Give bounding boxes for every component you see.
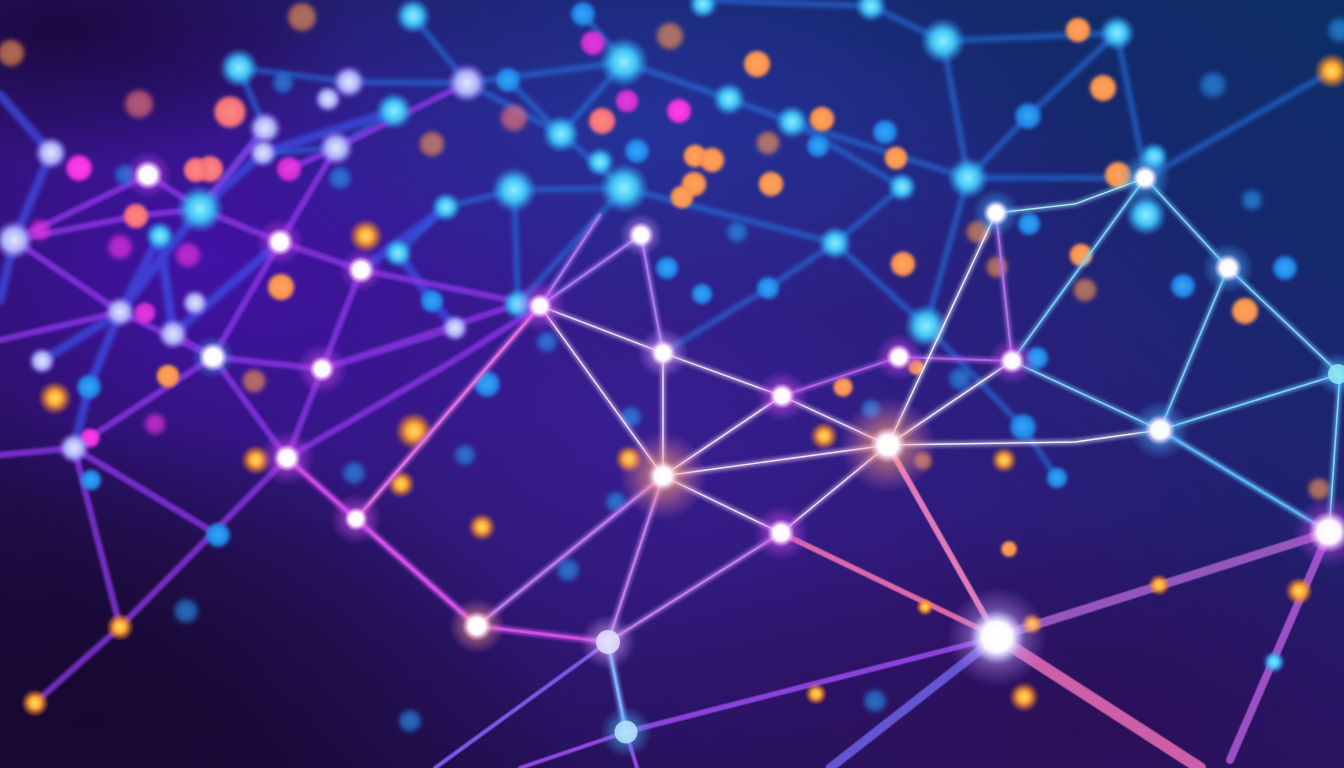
thick foreground bottom edges xyxy=(435,445,1329,768)
blurred blue background network lines xyxy=(200,0,1332,478)
cyan foreground edges, right xyxy=(888,178,1340,532)
blurred purple left network lines xyxy=(0,83,540,703)
pale violet dots xyxy=(0,63,487,464)
cyan glowing dots xyxy=(145,0,1169,348)
node halos xyxy=(124,151,1344,758)
blurred indigo left network lines xyxy=(0,95,455,448)
pink and magenta dots xyxy=(64,29,693,449)
blue dots xyxy=(75,0,1299,673)
node cores xyxy=(133,160,1344,744)
purple and pink foreground edges, left xyxy=(287,306,781,732)
dim orange dots xyxy=(0,1,1331,501)
bright glowing nodes xyxy=(124,151,1344,758)
white foreground edges, centre xyxy=(540,215,1012,533)
